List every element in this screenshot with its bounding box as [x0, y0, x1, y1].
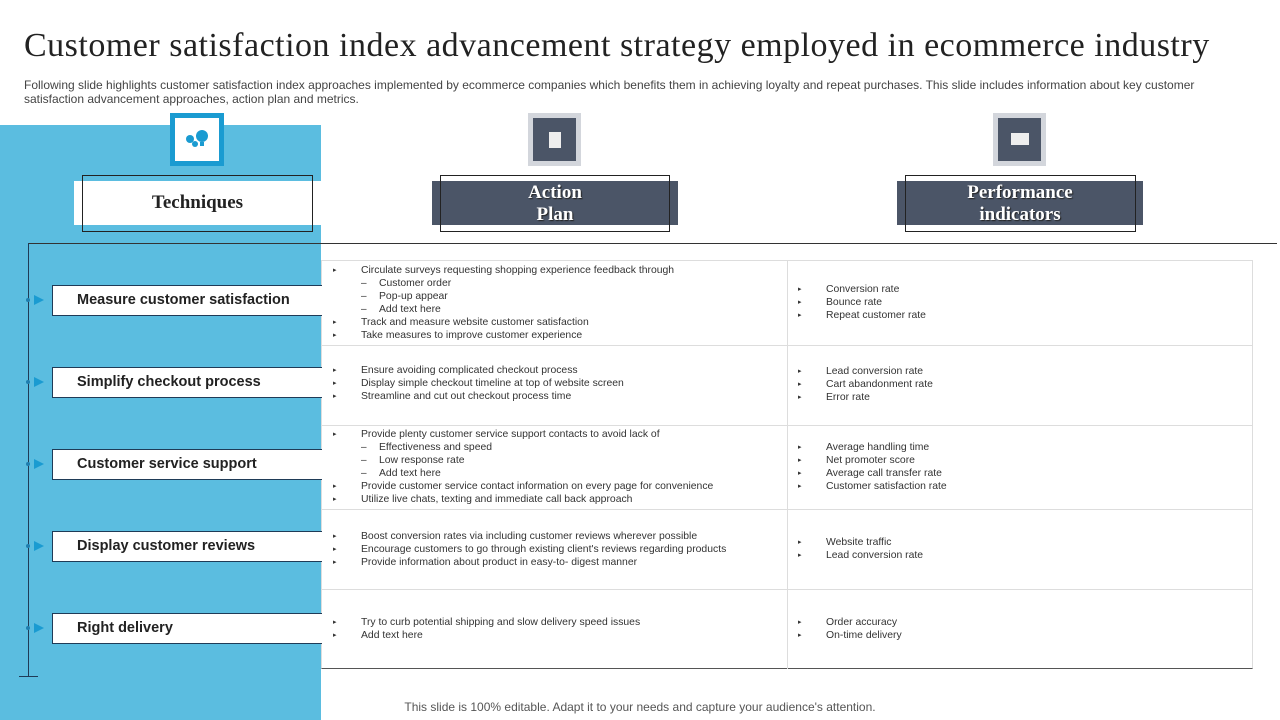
text: Display customer reviews: [77, 538, 255, 554]
text: Encourage customers to go through existing client's reviews regarding products: [361, 544, 726, 555]
text: Display simple checkout timeline at top of website screen: [361, 378, 624, 389]
table: [321, 260, 1253, 669]
title: Customer satisfaction index advancement strategy employed in ecommerce industry: [24, 27, 1210, 64]
text: Streamline and cut out checkout process time: [361, 391, 571, 402]
text: Lead conversion rate: [826, 550, 923, 561]
timeline lines: [28, 243, 1277, 244]
technique boxes: Measure customer satisfaction: [77, 292, 290, 308]
subtitle: Following slide highlights customer satisfaction index approaches implemented by ecommerce companies which benefits them in achieving loyalty and repeat purchases. This slide includes information about key customer satisfaction advancement approaches, action plan and metrics.: [24, 78, 1194, 106]
icon: performance: [993, 113, 1046, 166]
text: Right delivery: [77, 620, 173, 636]
text: Average call transfer rate: [826, 468, 942, 479]
text: Try to curb potential shipping and slow delivery speed issues: [361, 617, 640, 628]
heading: action plan: Plan: [537, 204, 573, 225]
heading: performance indicators: [897, 181, 1143, 225]
performance lists: Conversion rate: [826, 284, 899, 295]
text: Ensure avoiding complicated checkout process: [361, 365, 578, 376]
text: Cart abandonment rate: [826, 379, 933, 390]
performance lists: Repeat customer rate: [826, 310, 926, 321]
footer: This slide is 100% editable. Adapt it to your needs and capture your audience's attention.: [404, 700, 876, 714]
text: Provide plenty customer service support contacts to avoid lack of: [361, 429, 660, 440]
text: Customer satisfaction rate: [826, 481, 947, 492]
text: Customer service support: [77, 456, 257, 472]
icon: techniques: [170, 113, 224, 166]
technique boxes: [52, 285, 322, 316]
text: Error rate: [826, 392, 870, 403]
blue panel: [0, 125, 321, 720]
action plan lists: Add text here: [379, 304, 441, 315]
text: Simplify checkout process: [77, 374, 261, 390]
icon: action plan: [528, 113, 581, 166]
heading: action plan: [432, 181, 678, 225]
action plan lists: Pop-up appear: [379, 291, 448, 302]
performance lists: Bounce rate: [826, 297, 882, 308]
heading: performance indicators: indicators: [979, 204, 1061, 225]
heading: techniques: [74, 181, 321, 225]
action plan lists: [333, 265, 674, 341]
text: Provide information about product in easy-to- digest manner: [361, 557, 637, 568]
text: Add text here: [379, 468, 441, 479]
text: Effectiveness and speed: [379, 442, 492, 453]
text: Provide customer service contact information on every page for convenience: [361, 481, 713, 492]
action plan lists: Track and measure website customer satisfaction: [361, 317, 589, 328]
text: Low response rate: [379, 455, 464, 466]
action plan lists: Take measures to improve customer experience: [361, 330, 582, 341]
text: Boost conversion rates via including customer reviews wherever possible: [361, 531, 697, 542]
performance lists: [798, 284, 926, 321]
heading: action plan: Action: [528, 182, 582, 203]
action plan lists: Customer order: [379, 278, 451, 289]
arrows: [26, 295, 44, 305]
text: Order accuracy: [826, 617, 897, 628]
text: On-time delivery: [826, 630, 902, 641]
text: Website traffic: [826, 537, 891, 548]
text: Add text here: [361, 630, 423, 641]
text: Lead conversion rate: [826, 366, 923, 377]
text: Utilize live chats, texting and immediate call back approach: [361, 494, 632, 505]
text: Net promoter score: [826, 455, 915, 466]
action plan lists: Circulate surveys requesting shopping experience feedback through: [361, 265, 674, 276]
heading: performance indicators: Performance: [967, 182, 1073, 203]
text: Average handling time: [826, 442, 929, 453]
heading: techniques: Techniques: [152, 192, 243, 213]
